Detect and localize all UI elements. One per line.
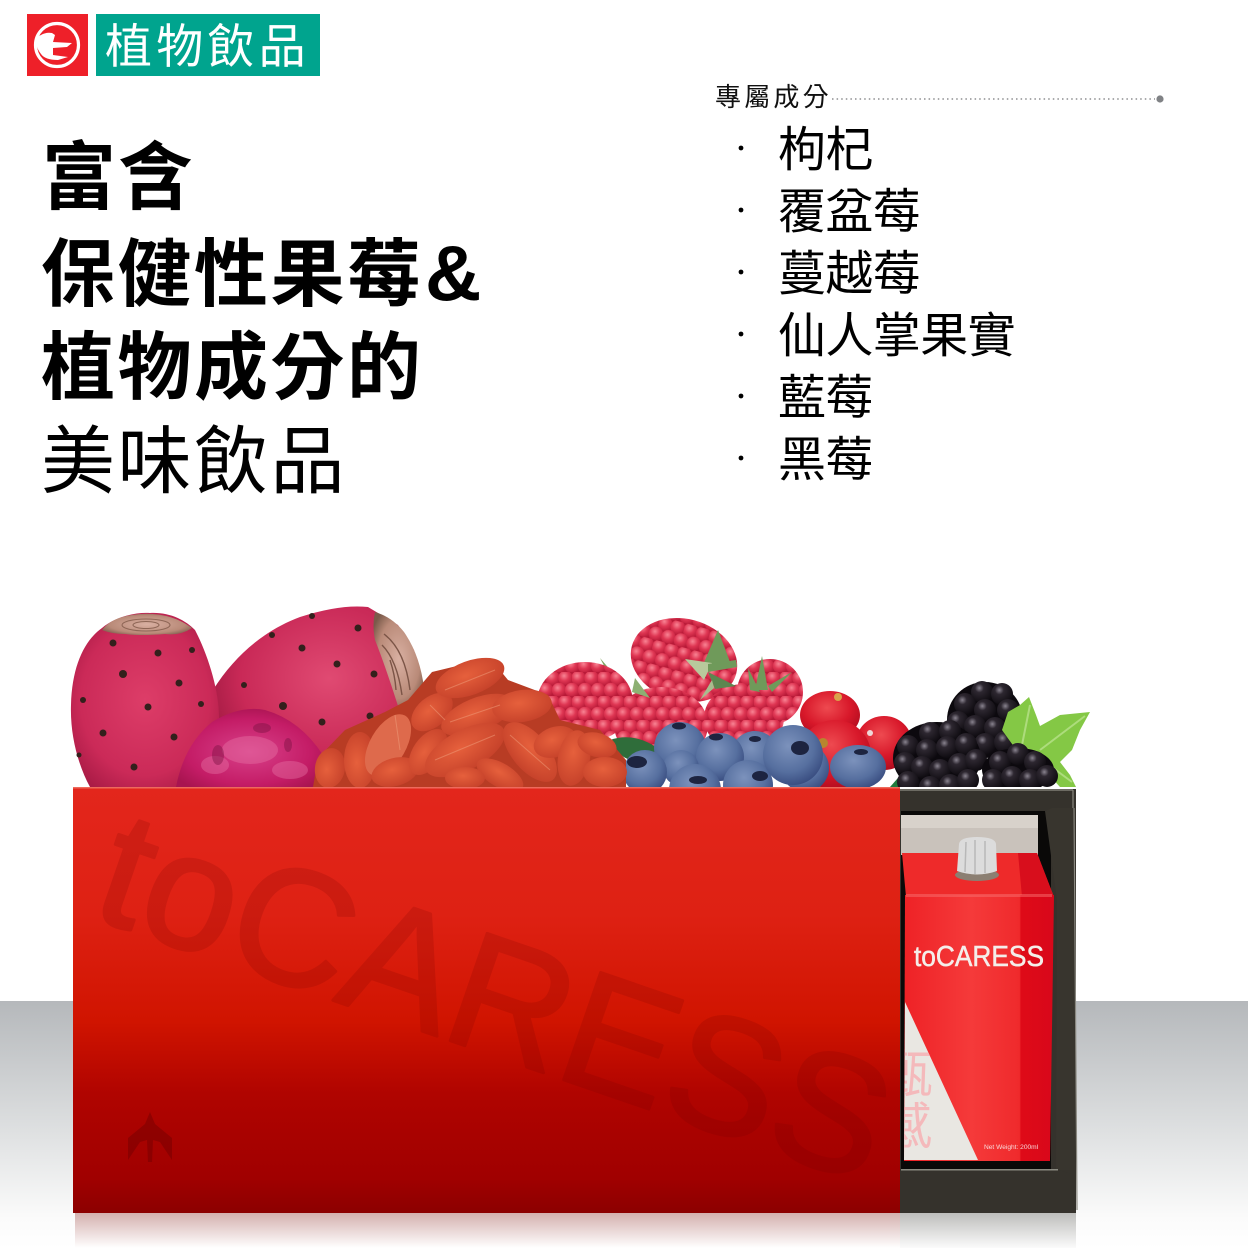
logo emblem xyxy=(27,14,88,76)
ingredients list: 黑莓 xyxy=(778,434,873,487)
main heading: 富含 xyxy=(42,136,195,219)
ingredients list xyxy=(739,124,1015,487)
raspberry leaves xyxy=(632,630,792,700)
box reflection xyxy=(75,1213,1076,1248)
ingredients list: 覆盆莓 xyxy=(778,186,920,239)
tray right side xyxy=(1045,808,1076,1170)
gift tray xyxy=(882,789,1077,1213)
main heading: 植物成分的 xyxy=(41,326,424,409)
carton white triangle xyxy=(904,1002,978,1160)
category tag: 植物飲品 xyxy=(105,20,310,73)
red sleeve box xyxy=(73,775,914,1217)
main heading: 美味飲品 xyxy=(41,420,347,503)
raspberries xyxy=(538,618,803,746)
carton net weight: Net Weight: 200ml xyxy=(984,1144,1039,1151)
tray bottom flap xyxy=(901,1170,1076,1210)
main heading: & xyxy=(425,229,481,317)
goji berries xyxy=(313,658,627,787)
cranberries xyxy=(800,691,909,787)
box emblem xyxy=(128,1112,172,1162)
ingredients list: 枸杞 xyxy=(778,124,873,177)
blackberries xyxy=(893,681,1090,798)
main heading xyxy=(41,136,481,503)
main heading: 保健性果莓 xyxy=(41,233,424,316)
juice carton: 甄 xyxy=(882,1047,932,1103)
juice carton: 感 xyxy=(882,1099,932,1155)
blueberries xyxy=(612,722,886,787)
juice carton xyxy=(901,815,1054,1161)
leaf xyxy=(1002,697,1090,787)
ingredients heading with dotted leader: 專屬成分 xyxy=(715,82,832,112)
ingredients heading with dotted leader xyxy=(715,82,1164,112)
ingredients list: 仙人掌果實 xyxy=(778,310,1015,363)
floor band xyxy=(0,1001,1248,1248)
ingredients list: 藍莓 xyxy=(778,372,873,425)
box watermark: toCARESS xyxy=(77,775,914,1217)
carton cap xyxy=(955,837,999,881)
prickly pears xyxy=(71,606,424,787)
ingredients list: 蔓越莓 xyxy=(778,248,920,301)
carton brand: toCARESS xyxy=(914,941,1044,973)
fruit pile xyxy=(70,606,1090,787)
logo xyxy=(27,14,320,76)
